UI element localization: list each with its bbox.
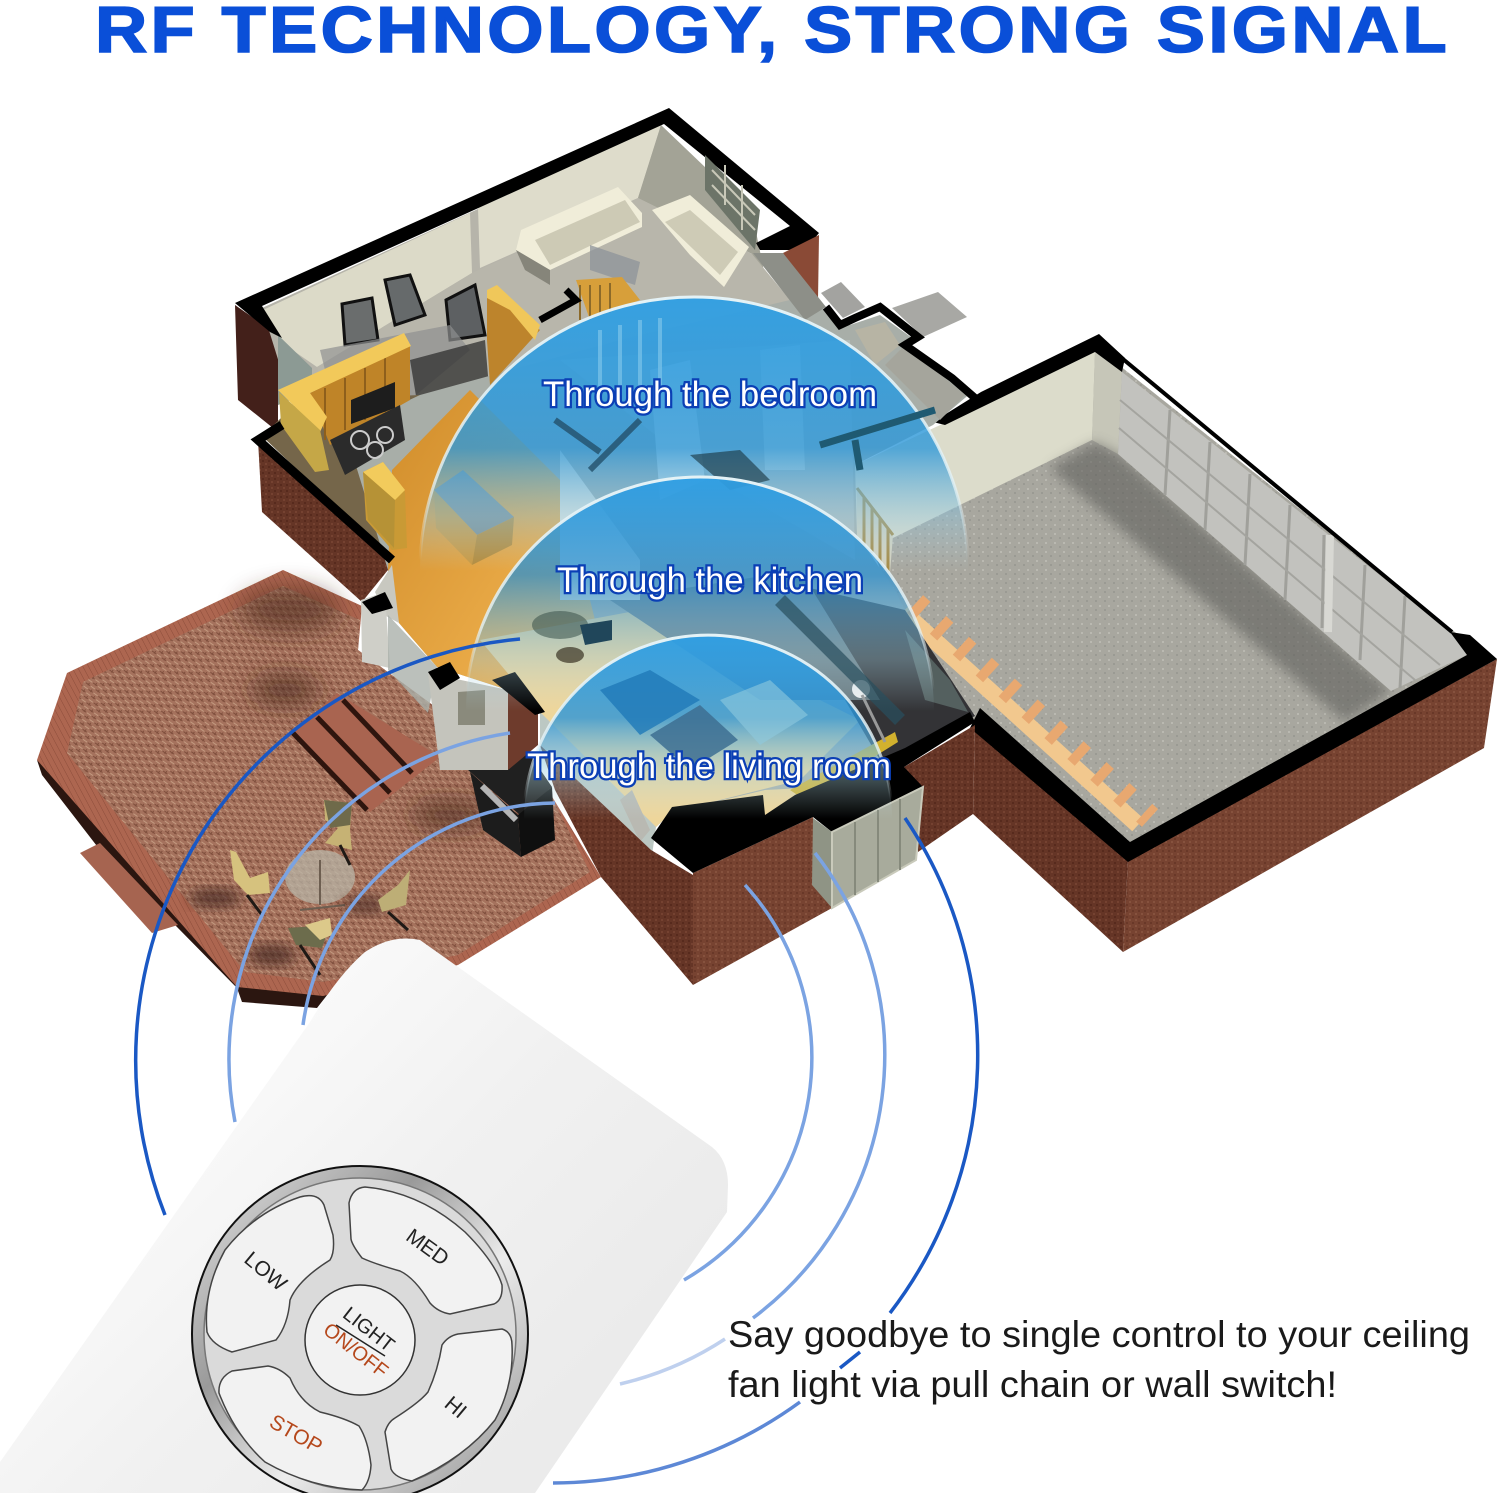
patio deck — [37, 570, 601, 1008]
button: MED: MED — [402, 1225, 453, 1271]
staircase steps — [903, 604, 1150, 825]
back exterior steps — [821, 282, 967, 337]
button: HI: HI — [440, 1392, 471, 1423]
garage doors wall — [1118, 372, 1467, 691]
button: light on/off: LIGHT — [338, 1303, 398, 1357]
signal dome: living room — [524, 635, 892, 819]
signal wave: inner — [303, 803, 812, 1280]
button: light on/off: ON/OFF — [319, 1319, 392, 1383]
signal wave: middle — [229, 733, 885, 1384]
button: STOP — [219, 1366, 371, 1490]
black wall band and TV — [651, 712, 975, 873]
remote control — [0, 938, 728, 1493]
yellow shelf — [790, 732, 898, 800]
signal dome: kitchen — [466, 477, 934, 720]
garage — [845, 334, 1497, 952]
dark sofa and storage — [905, 630, 968, 712]
button: MED — [349, 1187, 502, 1314]
label: through the bedroom: Through the bedroom — [543, 375, 877, 414]
upper cabinets — [278, 333, 411, 475]
button: light on/off — [305, 1285, 415, 1395]
garage back wall — [845, 352, 1095, 560]
side wall and small rooms — [753, 253, 975, 420]
dining chairs — [320, 275, 490, 420]
window walls — [361, 565, 656, 862]
button: LOW — [206, 1196, 334, 1352]
description text: Say goodbye to single control to your ceiling — [728, 1314, 1470, 1355]
divider — [540, 290, 576, 320]
label: through the living room: Through the living room — [527, 747, 891, 786]
signal wave: outer — [136, 639, 978, 1483]
signal dome: bedroom — [420, 297, 968, 571]
utility panel — [812, 787, 923, 908]
button: LOW: LOW — [240, 1247, 291, 1296]
patio steps — [293, 693, 440, 812]
label: through the kitchen: Through the kitchen — [557, 561, 863, 600]
small cabinet — [363, 462, 407, 550]
grill — [468, 753, 555, 857]
button: HI — [385, 1329, 512, 1481]
house front exterior walls — [540, 712, 975, 985]
stair railing — [576, 277, 640, 320]
lower level black wall — [258, 425, 392, 560]
stair rail near garage — [857, 488, 893, 573]
patio furniture — [189, 800, 410, 975]
description text: fan light via pull chain or wall switch! — [728, 1364, 1337, 1405]
center cabinet — [487, 285, 540, 385]
patio shadows — [240, 588, 490, 830]
island — [434, 470, 514, 565]
button: STOP: STOP — [265, 1410, 326, 1459]
description text — [728, 1314, 1470, 1405]
sofas — [516, 187, 749, 287]
upper level room — [235, 108, 819, 450]
garage floor shadow — [1050, 442, 1391, 722]
button cluster — [192, 1166, 528, 1493]
lower level floor — [258, 253, 975, 862]
